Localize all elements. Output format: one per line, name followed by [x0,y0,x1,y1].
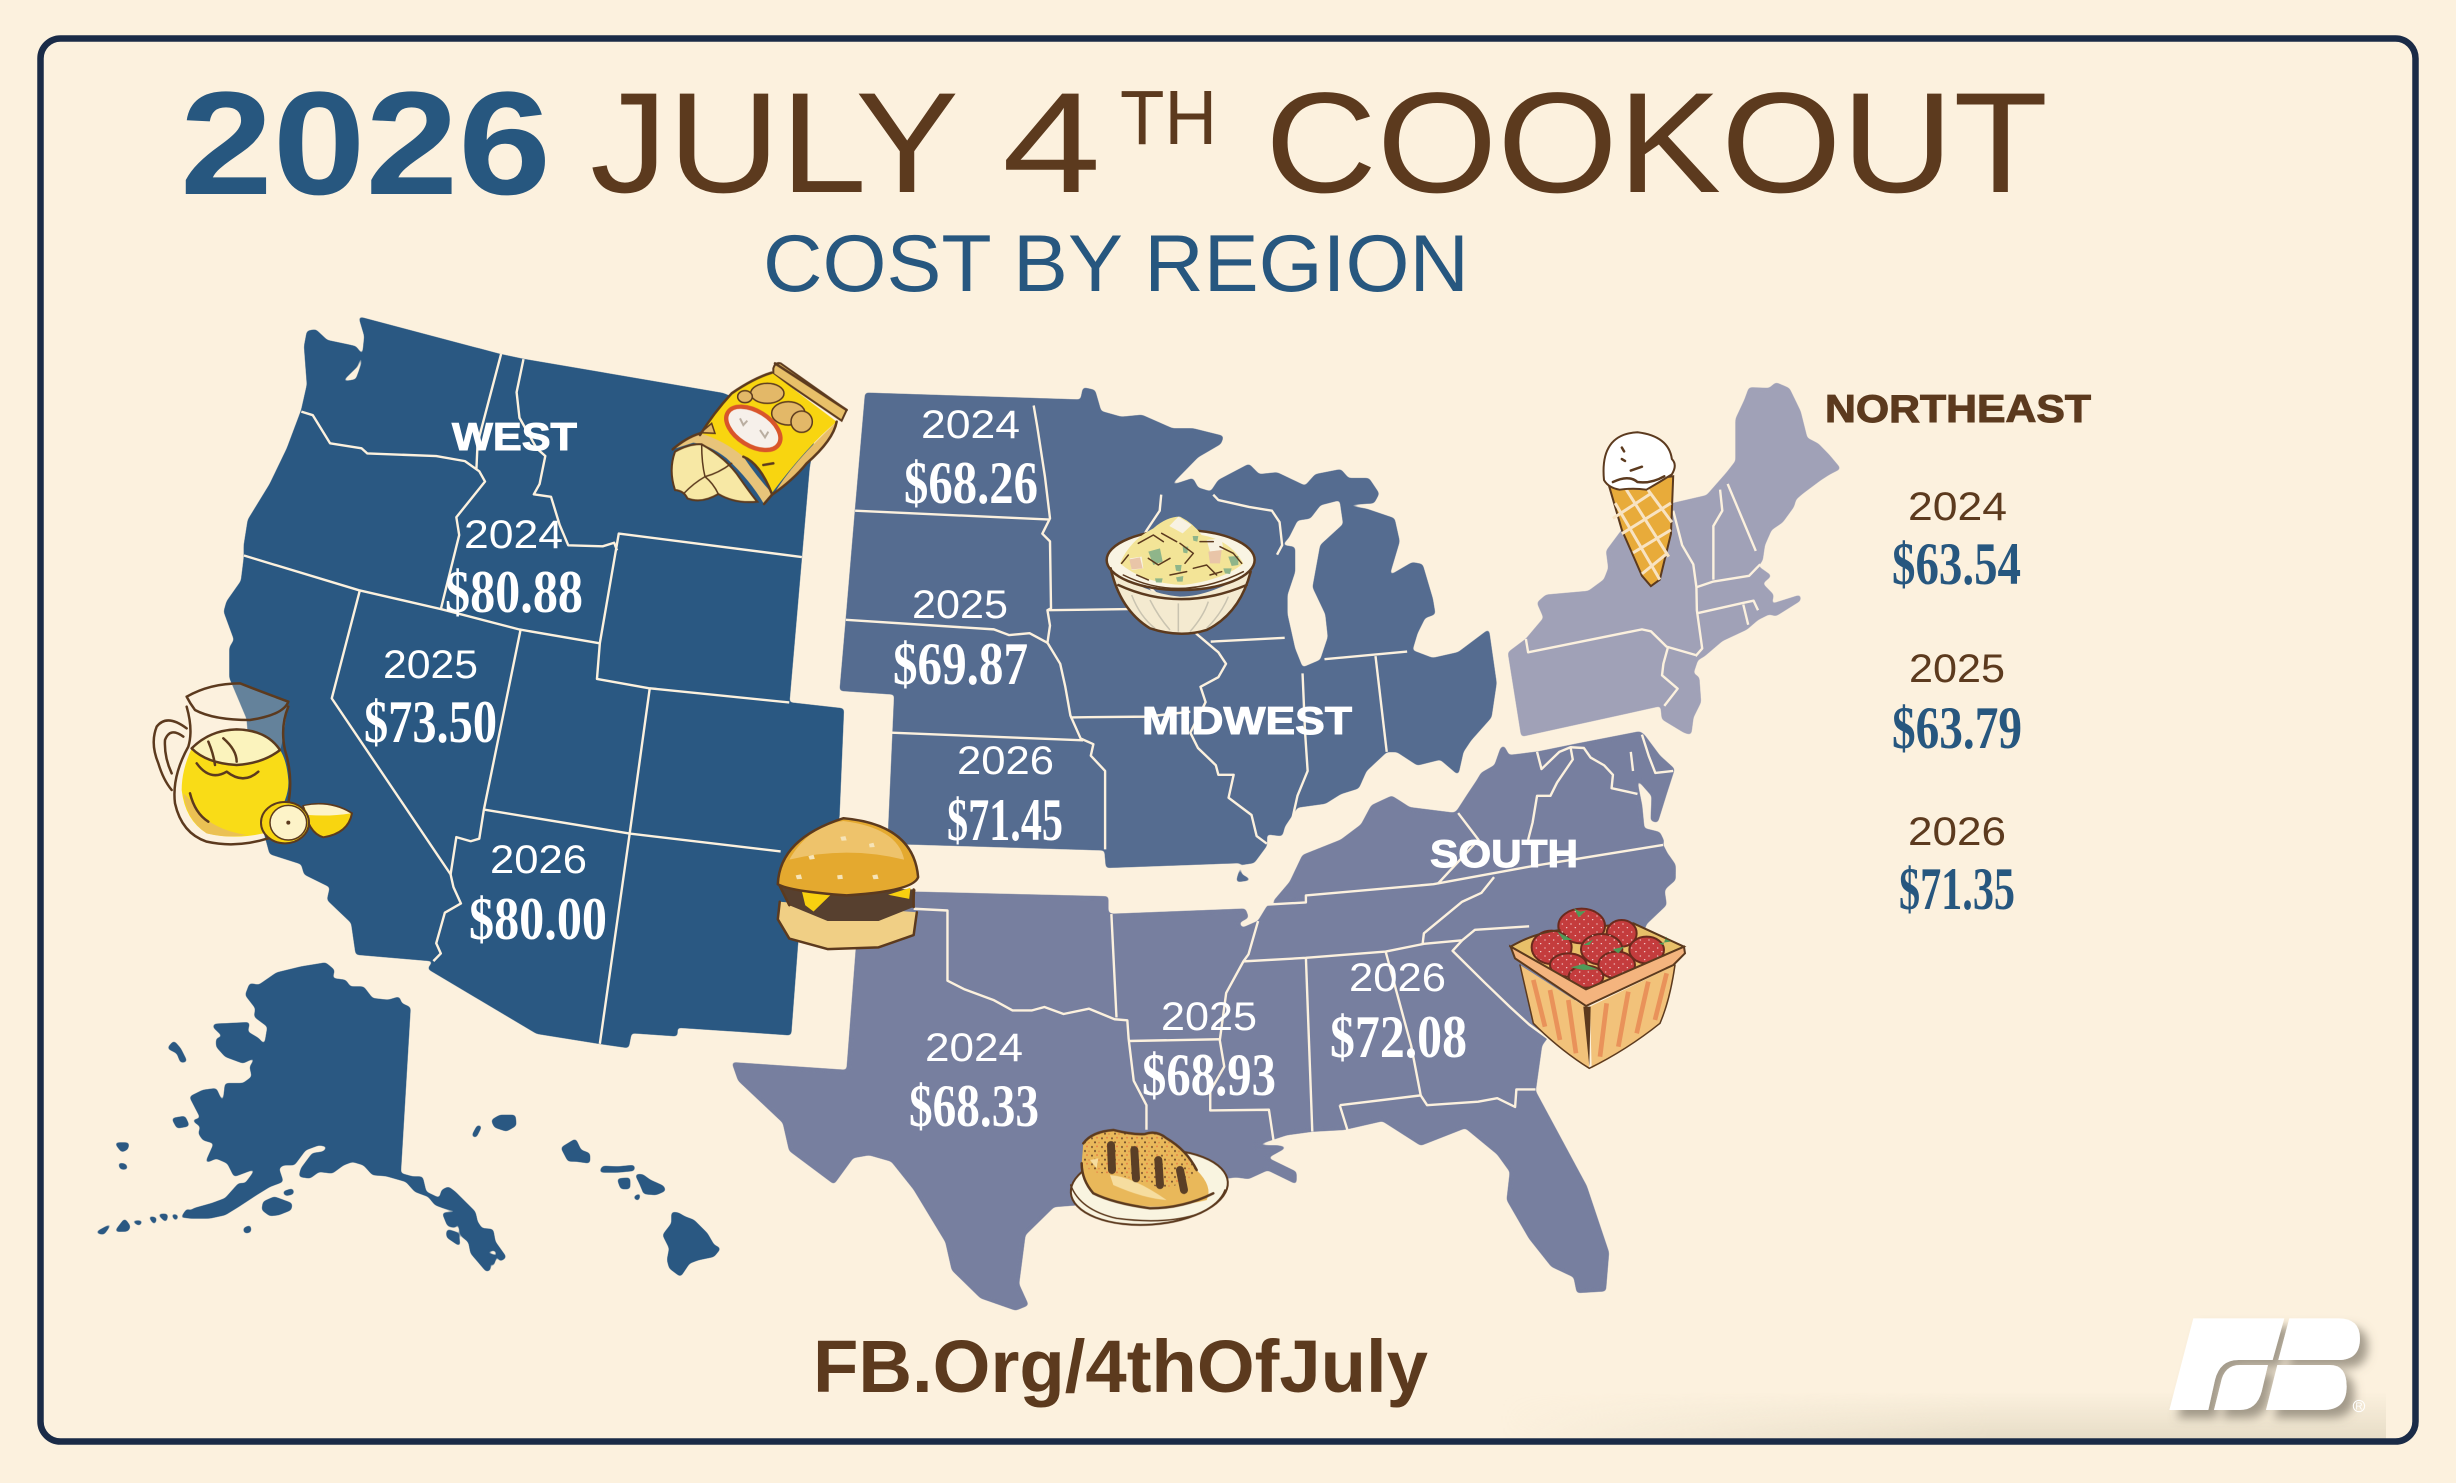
South prices: 2025 [1161,995,1257,1039]
Northeast figures: 2024 [1908,485,2007,529]
title [180,62,2048,226]
Midwest prices: $69.87 [893,631,1028,697]
West prices [364,513,607,952]
Midwest prices: $68.26 [904,450,1038,516]
South prices: 2024 [925,1026,1023,1070]
label: South: SOUTH [1430,833,1578,876]
Midwest prices: 2026 [957,739,1054,783]
icon: ice cream cone [1604,432,1675,586]
map region: Northeast [1508,383,1841,737]
icon: basket of strawberries [1511,908,1685,1068]
map region: South [732,732,1676,1310]
West prices: $80.00 [469,886,607,952]
Northeast figures: $63.79 [1892,695,2022,761]
logo: Farm Bureau: R [2355,1402,2363,1413]
website link: FB.Org/4thOfJuly [813,1325,1428,1408]
icon: pitcher of lemonade [154,683,352,844]
icon: grilled chicken on a plate [1068,1130,1230,1230]
Midwest prices: 2024 [921,403,1020,447]
logo: Farm Bureau [2169,1318,2365,1413]
icon: bowl of potato salad [1107,517,1255,634]
Midwest prices [893,403,1063,853]
midwest states [840,388,1496,882]
Northeast figures: $63.54 [1892,531,2021,597]
title: 2026 [180,62,551,226]
label: Midwest: MIDWEST [1142,700,1352,743]
South prices: $68.93 [1142,1042,1276,1108]
Midwest prices: 2025 [912,583,1008,627]
Northeast figures: 2025 [1909,647,2005,691]
west state lines [244,354,802,1044]
West prices: 2024 [464,513,563,557]
title: 4 [1002,64,1101,223]
Northeast figures: 2026 [1908,810,2006,854]
West prices: 2025 [383,643,478,687]
West prices: 2026 [490,838,587,882]
south land masses [732,732,1676,1310]
label: West: WEST [452,416,577,459]
title: TH [1120,75,1217,161]
South prices [909,956,1467,1139]
heading: Northeast: NORTHEAST [1825,388,2091,431]
map region: West [95,317,844,1277]
South prices: $72.08 [1330,1004,1467,1070]
contiguous west states [95,317,844,1277]
map region: Midwest [840,388,1496,882]
Midwest prices: $71.45 [947,787,1063,853]
South prices: 2026 [1349,956,1446,1000]
south state lines [914,735,1673,1144]
subtitle: COST BY REGION [763,219,1469,309]
West prices: $80.88 [445,559,583,625]
Northeast figures: $71.35 [1899,856,2015,922]
icon: bag of chips [672,363,847,504]
icon: cheeseburger [778,818,918,949]
South prices: $68.33 [909,1073,1039,1139]
title: JULY [590,64,959,223]
panel: Northeast prices [1825,388,2091,922]
midwest state lines [846,405,1407,849]
West prices: $73.50 [364,689,497,755]
title: COOKOUT [1265,64,2048,223]
logo shadow backdrop [1667,1406,2386,1438]
Northeast figures [1892,485,2022,922]
